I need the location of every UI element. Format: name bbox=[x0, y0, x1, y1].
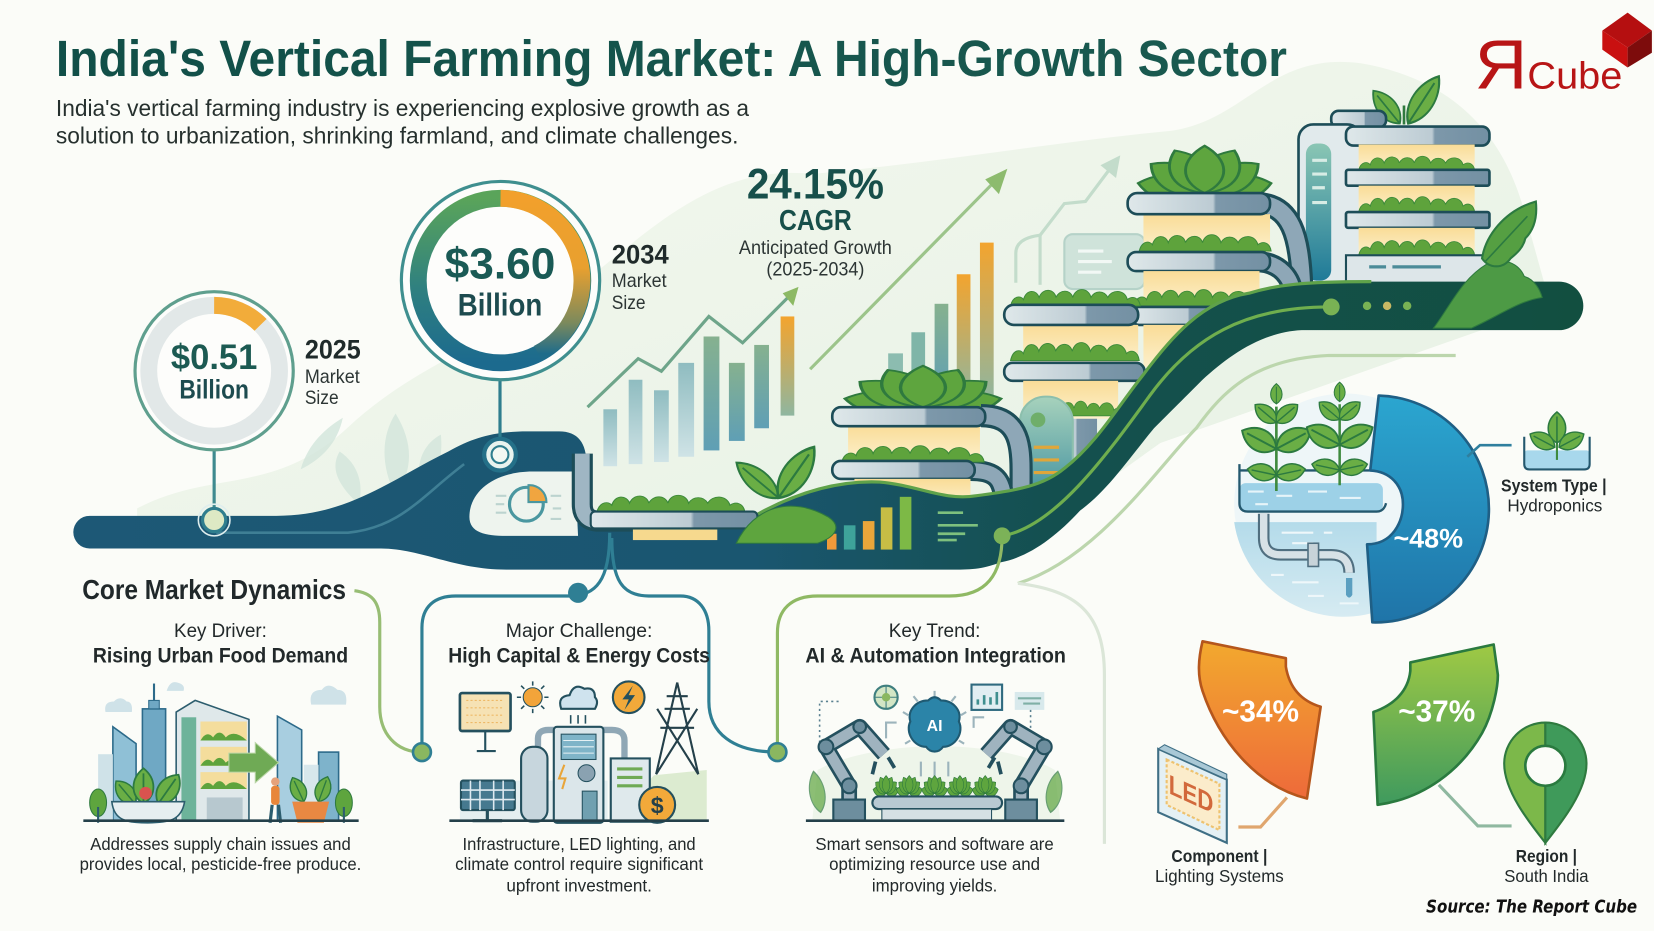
description bbox=[80, 834, 361, 874]
icon: hydroponic tank bbox=[1524, 412, 1590, 469]
label bbox=[1155, 846, 1284, 886]
water ripples bbox=[1271, 533, 1359, 603]
heading bbox=[448, 620, 710, 667]
metric: 2025 market size: 2025 bbox=[305, 335, 361, 365]
mini bars in band bbox=[827, 497, 978, 550]
bar chart: rising growth bbox=[588, 287, 799, 466]
value: ~37% bbox=[1398, 695, 1475, 729]
description: improving yields. bbox=[872, 875, 997, 895]
panel: key driver bbox=[80, 620, 361, 874]
icon: energy infrastructure: $ bbox=[651, 792, 664, 818]
metric: CAGR: CAGR bbox=[779, 205, 852, 237]
metric: CAGR: (2025-2034) bbox=[766, 259, 864, 280]
segment: hydroponics 48% bbox=[1234, 382, 1607, 622]
heading: Rising Urban Food Demand bbox=[93, 644, 348, 667]
metric: 2034 market size: Size bbox=[612, 293, 646, 314]
description: optimizing resource use and bbox=[829, 854, 1040, 874]
icon: LED panel: LED bbox=[1169, 768, 1213, 819]
connector bbox=[1467, 445, 1512, 457]
metric: 2034 market size: Billion bbox=[458, 286, 542, 322]
background green wave bbox=[137, 62, 1551, 549]
metric: CAGR bbox=[739, 160, 892, 280]
band pocket with pie icon bbox=[469, 472, 578, 536]
sprout and bush at centre bbox=[730, 440, 836, 543]
label: Component | bbox=[1171, 846, 1267, 866]
planter tower: top right bbox=[1299, 70, 1489, 284]
heading: High Capital & Energy Costs bbox=[448, 644, 710, 667]
description: upfront investment. bbox=[506, 875, 652, 895]
connector bbox=[1238, 797, 1287, 827]
logo: RCube: Cube bbox=[1527, 56, 1622, 98]
pipe bbox=[1264, 514, 1349, 573]
node dots on band bbox=[1323, 299, 1411, 315]
band highlight lines bbox=[216, 282, 1371, 536]
arrow: long growth arrow bbox=[810, 169, 1007, 369]
connectors bbox=[354, 355, 1456, 844]
lower shelf with pipe bbox=[582, 454, 757, 540]
description: Smart sensors and software are bbox=[815, 834, 1054, 854]
metric: 2034 market size: Market bbox=[612, 271, 667, 292]
heading bbox=[93, 620, 348, 667]
metric: 2025 market size: Billion bbox=[179, 375, 249, 405]
blue pie bbox=[1367, 396, 1489, 622]
bar chart: second growth bars bbox=[888, 243, 994, 401]
connector nodes bbox=[413, 527, 1011, 761]
heading: Key Trend: bbox=[889, 620, 980, 642]
metric: CAGR: Anticipated Growth bbox=[739, 238, 892, 259]
heading bbox=[805, 620, 1066, 667]
icon: energy infrastructure bbox=[449, 681, 709, 823]
metric: CAGR: 24.15% bbox=[747, 160, 884, 207]
screen: pale dashboard bbox=[1064, 234, 1145, 289]
faded leaves bbox=[301, 413, 441, 504]
metric: 2025 market size: Size bbox=[305, 388, 339, 409]
value: ~48% bbox=[1393, 523, 1463, 553]
connector bbox=[1439, 785, 1512, 826]
description bbox=[455, 834, 703, 895]
heading: Major Challenge: bbox=[506, 620, 652, 642]
label: Hydroponics bbox=[1507, 496, 1602, 516]
tower plant bbox=[1366, 70, 1448, 129]
planter stack: centre bbox=[1004, 290, 1145, 493]
description bbox=[815, 834, 1054, 895]
label: System Type | bbox=[1501, 476, 1607, 496]
segment: south india 37% bbox=[1373, 645, 1589, 886]
metric: 2034 market size: 2034 bbox=[612, 240, 669, 270]
description: provides local, pesticide-free produce. bbox=[80, 854, 361, 874]
description: Addresses supply chain issues and bbox=[90, 834, 351, 854]
right end foliage bbox=[1434, 201, 1542, 328]
label: South India bbox=[1504, 866, 1589, 886]
label: AI: AI bbox=[927, 718, 942, 735]
description: climate control require significant bbox=[455, 854, 703, 874]
label bbox=[1501, 476, 1607, 516]
subtitle: solution to urbanization, shrinking farmland, and climate challenges. bbox=[56, 122, 738, 148]
plants bbox=[1237, 384, 1316, 491]
icon: AI robots and conveyor bbox=[806, 685, 1065, 821]
logo: RCube bbox=[1475, 13, 1652, 104]
metric: 2025 market size: $0.51 bbox=[171, 338, 257, 377]
segment: lighting systems 34% bbox=[1155, 641, 1321, 886]
panel: key trend bbox=[805, 620, 1066, 895]
subtitle: India's vertical farming industry is experiencing explosive growth as a bbox=[56, 95, 749, 121]
label: Lighting Systems bbox=[1155, 866, 1284, 886]
heading: Key Driver: bbox=[174, 620, 267, 642]
panel: major challenge bbox=[448, 620, 710, 895]
capsule module bbox=[1020, 397, 1073, 502]
arrow: pale data line bbox=[1016, 158, 1118, 285]
description: Infrastructure, LED lighting, and bbox=[463, 834, 696, 854]
main pipeline band bbox=[73, 282, 1583, 570]
logo: RCube: Я bbox=[1475, 26, 1527, 104]
planter stack: upper middle bbox=[1128, 145, 1302, 367]
title: India's Vertical Farming Market: A High-Growth Sector bbox=[56, 30, 1287, 87]
icon: city with vertical farm bbox=[83, 682, 359, 823]
tank bbox=[1239, 483, 1383, 512]
value: ~34% bbox=[1222, 695, 1299, 729]
label bbox=[1504, 846, 1589, 886]
subtitle bbox=[56, 95, 749, 148]
metric: 2025 market size: Market bbox=[305, 367, 360, 388]
label: Region | bbox=[1516, 846, 1577, 866]
water disc bbox=[1234, 393, 1456, 615]
planter stack: lower bbox=[832, 365, 1021, 505]
heading: AI & Automation Integration bbox=[805, 644, 1066, 667]
metric: 2034 market size bbox=[401, 181, 669, 470]
section heading: core market dynamics: Core Market Dynamics bbox=[82, 574, 346, 605]
metric: 2025 market size bbox=[135, 292, 361, 536]
icon: LED panel bbox=[1158, 745, 1227, 843]
icon: location pin bbox=[1504, 723, 1586, 843]
metric: 2034 market size: $3.60 bbox=[445, 240, 555, 288]
